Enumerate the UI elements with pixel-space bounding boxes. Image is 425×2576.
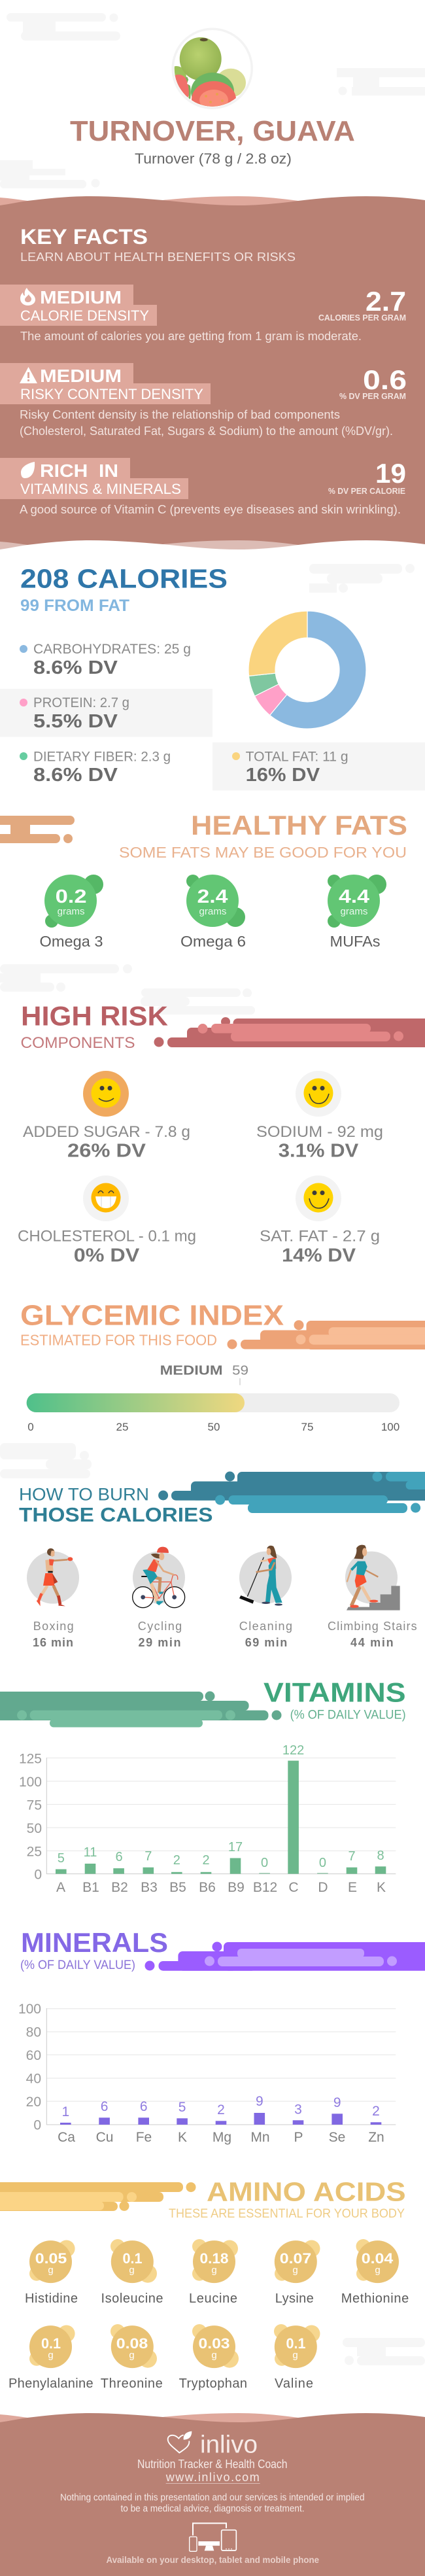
bar chart: minerals: 40: [26, 2071, 41, 2087]
fact: calorie density: [0, 285, 406, 343]
heading: AMINO ACIDS: [207, 2177, 406, 2207]
website: www.inlivo.com: [165, 2471, 260, 2484]
fat: omega 3: Omega 3: [39, 933, 103, 950]
bar chart: minerals: Cu: [96, 2130, 113, 2145]
decorative bars: [154, 1017, 425, 1047]
decorative bars: [0, 816, 75, 843]
fat: omega 3: [39, 875, 103, 950]
bar chart: minerals: 60: [26, 2048, 41, 2063]
value: 2.7: [366, 286, 406, 317]
amino: threonine: g: [129, 2350, 135, 2361]
icon: warning: [20, 367, 37, 383]
panel: high risk: [18, 1001, 425, 1266]
bar chart: vitamins: 2: [202, 1853, 210, 1868]
activity: boxing: [27, 1548, 79, 1649]
decorative bars: [145, 1941, 425, 1971]
rating: MEDIUM: [40, 287, 122, 307]
food photo: guava: [171, 27, 253, 109]
bar chart: minerals: Mg: [212, 2130, 231, 2145]
component: added sugar: 26% DV: [67, 1141, 146, 1162]
fat: MUFAs: 4.4: [339, 886, 369, 907]
fat: omega 6: grams: [199, 906, 226, 917]
activity: cycling: Cycling: [138, 1620, 182, 1633]
component: sodium: SODIUM - 92 mg: [256, 1123, 383, 1141]
nutrient: total fat: [212, 742, 425, 790]
component: added sugar: [23, 1071, 190, 1162]
icon: boxer: [27, 1548, 79, 1606]
panel: minerals: [18, 1927, 425, 2145]
title: TURNOVER, GUAVA: [70, 115, 355, 147]
disclaimer: [60, 2493, 365, 2515]
bar chart: minerals: Zn: [368, 2130, 384, 2145]
bar chart: minerals: Mn: [250, 2130, 270, 2145]
label: RISKY CONTENT DENSITY: [20, 386, 203, 402]
nutrient: carbohydrates: [20, 642, 191, 678]
amino: lysine: g: [292, 2265, 298, 2276]
nutrient: carbohydrates: 8.6% DV: [33, 657, 118, 678]
fat: omega 6: Omega 6: [180, 933, 246, 950]
bar chart: minerals: 5: [178, 2100, 186, 2115]
amino: leucine: Leucine: [189, 2291, 237, 2306]
bar chart: vitamins: 6: [115, 1850, 123, 1864]
nutrient: carbohydrates: CARBOHYDRATES: 25 g: [33, 642, 191, 657]
bar chart: vitamins: 7: [144, 1849, 152, 1864]
panel: healthy fats: [0, 810, 407, 950]
gauge scale: 100: [381, 1421, 400, 1433]
unit: % DV PER CALORIE: [328, 486, 405, 496]
icon: devices: [190, 2523, 236, 2551]
icon: person sweeping: [239, 1546, 292, 1606]
bar chart: vitamins: [19, 1743, 396, 1895]
bar chart: minerals: 6: [140, 2099, 148, 2114]
value: 0.6: [363, 364, 407, 395]
bar chart: minerals: 9: [256, 2094, 264, 2109]
bar chart: vitamins: 122: [282, 1743, 304, 1758]
activity: climbing stairs: [328, 1545, 417, 1649]
bar chart: vitamins: B2: [111, 1880, 128, 1895]
bar chart: minerals: 0: [33, 2118, 41, 2132]
description: [20, 408, 393, 438]
donut chart: [248, 611, 366, 729]
component: saturated fat: SAT. FAT - 2.7 g: [260, 1228, 380, 1245]
heading: HEALTHY FATS: [191, 810, 407, 841]
rating: MEDIUM: [160, 1363, 223, 1378]
bar chart: vitamins: E: [348, 1880, 357, 1895]
activity: cleaning: 69 min: [245, 1636, 287, 1649]
amino: histidine: 0.05: [35, 2250, 67, 2267]
gauge scale: 25: [116, 1421, 128, 1433]
fact: risky content density: [0, 363, 407, 438]
fat: omega 6: [180, 875, 246, 950]
label: CALORIE DENSITY: [20, 307, 149, 324]
component: cholesterol: 0% DV: [74, 1245, 140, 1266]
amino: threonine: 0.08: [116, 2335, 148, 2352]
subheading: SOME FATS MAY BE GOOD FOR YOU: [119, 844, 407, 861]
wave background: [0, 2413, 425, 2576]
bar chart: vitamins: D: [318, 1880, 328, 1895]
value: 19: [375, 458, 406, 489]
bar chart: vitamins: 8: [377, 1849, 384, 1863]
activity: boxing: Boxing: [33, 1620, 74, 1633]
amino: methionine: Methionine: [341, 2291, 409, 2306]
bar chart: vitamins: B9: [228, 1880, 245, 1895]
amino: tryptophan: [179, 2324, 247, 2391]
logo wordmark: inlivo: [200, 2431, 258, 2459]
amino: valine: [274, 2324, 320, 2391]
icon: person on stairs: [345, 1545, 400, 1610]
disclaimer: to be a medical advice, diagnosis or treatment.: [120, 2504, 305, 2515]
amino: phenylalanine: 0.1: [41, 2335, 61, 2352]
value: 59: [232, 1363, 248, 1378]
bar chart: vitamins: K: [377, 1880, 386, 1895]
gauge scale: 50: [208, 1421, 220, 1433]
panel: footer: [0, 2413, 425, 2576]
gauge scale: 75: [301, 1421, 313, 1433]
panel: vitamins: [0, 1677, 406, 1895]
activity: boxing: 16 min: [33, 1636, 73, 1649]
nutrient: dietary fiber: [20, 749, 171, 786]
activity: climbing stairs: 44 min: [350, 1636, 394, 1649]
amino: threonine: [101, 2324, 163, 2391]
bar chart: minerals: Fe: [136, 2130, 152, 2145]
bar chart: vitamins: 17: [228, 1840, 243, 1854]
bar chart: vitamins: B6: [199, 1880, 216, 1895]
heading: VITAMINS: [264, 1677, 406, 1708]
nutrient: total fat: 16% DV: [246, 765, 320, 786]
bar chart: vitamins: C: [288, 1880, 299, 1895]
bar chart: minerals: [18, 2002, 396, 2145]
nutrient: dietary fiber: 8.6% DV: [33, 765, 118, 786]
heading: HIGH RISK: [21, 1001, 168, 1031]
heading: MINERALS: [21, 1927, 168, 1958]
bar chart: minerals: 2: [372, 2104, 380, 2119]
fat: omega 3: 0.2: [56, 886, 87, 907]
bar chart: vitamins: 125: [19, 1751, 42, 1766]
panel: amino acids: [0, 2177, 409, 2391]
icon: cyclist: [133, 1547, 185, 1608]
amino: valine: 0.1: [286, 2335, 306, 2352]
label: VITAMINS & MINERALS: [20, 481, 181, 497]
subheading: COMPONENTS: [21, 1034, 135, 1052]
description: Risky Content density is the relationship of bad components: [20, 408, 340, 421]
component: added sugar: ADDED SUGAR - 7.8 g: [23, 1123, 190, 1141]
nutrient: protein: PROTEIN: 2.7 g: [33, 695, 129, 710]
rating: RICH IN: [40, 461, 118, 481]
amino: histidine: g: [48, 2265, 54, 2276]
panel: glycemic index: [20, 1300, 425, 1433]
activity: climbing stairs: Climbing Stairs: [328, 1620, 417, 1633]
amino: threonine: Threonine: [101, 2376, 163, 2391]
logo icon: [168, 2431, 192, 2453]
bar chart: minerals: P: [294, 2130, 303, 2145]
component: saturated fat: 14% DV: [282, 1245, 356, 1266]
wave top: [0, 196, 425, 553]
panel: key facts: [0, 196, 425, 560]
component: sodium: [256, 1071, 383, 1162]
bar chart: vitamins: B1: [82, 1880, 99, 1895]
amino: lysine: [275, 2240, 320, 2306]
amino: phenylalanine: Phenylalanine: [8, 2376, 94, 2391]
subheading: LEARN ABOUT HEALTH BENEFITS OR RISKS: [20, 251, 296, 264]
fat: MUFAs: MUFAs: [330, 933, 381, 950]
bar chart: vitamins: 2: [173, 1853, 180, 1868]
fat: omega 3: grams: [58, 906, 85, 917]
icon: flame: [20, 288, 35, 305]
heading line 2: THOSE CALORIES: [19, 1503, 213, 1526]
heading: KEY FACTS: [20, 225, 148, 249]
nutrient: dietary fiber: DIETARY FIBER: 2.3 g: [33, 749, 171, 764]
amino: phenylalanine: g: [48, 2350, 54, 2361]
bar chart: minerals: 9: [333, 2095, 341, 2110]
amino: lysine: 0.07: [280, 2250, 311, 2267]
bar chart: vitamins: 25: [27, 1844, 42, 1859]
amino: histidine: [25, 2240, 78, 2306]
amino: valine: Valine: [275, 2376, 313, 2391]
fat: omega 6: 2.4: [197, 886, 228, 907]
amino: leucine: g: [211, 2265, 217, 2276]
amino: tryptophan: g: [211, 2350, 217, 2361]
amino: isoleucine: 0.1: [123, 2250, 143, 2267]
heading: 208 CALORIES: [20, 564, 228, 594]
activity: cleaning: Cleaning: [239, 1620, 292, 1633]
description: (Cholesterol, Saturated Fat, Sugars & Sodium) to the amount (%DV/gr).: [20, 425, 393, 438]
tagline: Nutrition Tracker & Health Coach: [137, 2458, 288, 2471]
fact: vitamins and minerals: [0, 458, 406, 516]
bar chart: minerals: 2: [217, 2102, 225, 2117]
bar chart: vitamins: 11: [84, 1845, 97, 1860]
bar chart: minerals: 3: [294, 2102, 302, 2117]
description: A good source of Vitamin C (prevents eye diseases and skin wrinkling).: [20, 503, 401, 516]
fat: MUFAs: grams: [340, 906, 367, 917]
bar chart: minerals: Se: [329, 2130, 345, 2145]
heading line 1: HOW TO BURN: [19, 1485, 149, 1505]
unit: % DV PER GRAM: [339, 391, 406, 401]
bar chart: vitamins: B5: [169, 1880, 186, 1895]
decorative bars: [0, 1692, 281, 1727]
bar chart: vitamins: 50: [27, 1821, 42, 1836]
activity: cycling: 29 min: [139, 1636, 180, 1649]
gauge: [27, 1378, 400, 1412]
component: saturated fat: [260, 1175, 380, 1266]
amino: tryptophan: Tryptophan: [179, 2376, 247, 2391]
amino: methionine: [341, 2239, 409, 2306]
bar chart: minerals: 6: [101, 2099, 108, 2114]
component: cholesterol: CHOLESTEROL - 0.1 mg: [18, 1228, 196, 1245]
bar chart: minerals: 1: [61, 2104, 69, 2119]
bar chart: vitamins: 75: [27, 1798, 42, 1813]
component: sodium: 3.1% DV: [279, 1141, 359, 1162]
bar chart: vitamins: 0: [319, 1856, 326, 1870]
amino: isoleucine: g: [129, 2265, 135, 2276]
nutrient: protein: [0, 689, 212, 737]
bar chart: vitamins: B12: [253, 1880, 277, 1895]
subheading: (% OF DAILY VALUE): [290, 1709, 406, 1722]
decorative bars: [228, 1320, 425, 1349]
subheading: ESTIMATED FOR THIS FOOD: [20, 1332, 217, 1349]
subheading: (% OF DAILY VALUE): [20, 1958, 135, 1972]
availability note: Available on your desktop, tablet and mobile phone: [106, 2554, 319, 2565]
unit: CALORIES PER GRAM: [318, 313, 406, 322]
bar chart: vitamins: 0: [34, 1868, 42, 1883]
bar chart: minerals: 20: [26, 2095, 41, 2110]
nutrient: protein: 5.5% DV: [33, 711, 118, 732]
bar chart: minerals: 80: [26, 2025, 41, 2040]
serving size: Turnover (78 g / 2.8 oz): [135, 150, 292, 167]
amino: histidine: Histidine: [25, 2291, 78, 2306]
activity: cycling: [133, 1547, 185, 1649]
amino: methionine: 0.04: [362, 2250, 394, 2267]
bar chart: minerals: K: [178, 2130, 187, 2145]
panel: header: [70, 29, 355, 167]
panel: calories: [0, 564, 425, 790]
bar chart: vitamins: 100: [19, 1775, 42, 1790]
bar chart: vitamins: 7: [348, 1849, 356, 1864]
fat: MUFAs: [328, 875, 386, 950]
subheading: THESE ARE ESSENTIAL FOR YOUR BODY: [169, 2206, 405, 2221]
decorative bars: [0, 2182, 196, 2211]
bar chart: vitamins: 5: [58, 1851, 65, 1866]
component: cholesterol: [18, 1175, 196, 1266]
bar chart: vitamins: 0: [261, 1856, 268, 1870]
wave bottom: [0, 540, 425, 560]
icon: leaf: [21, 462, 35, 478]
amino: leucine: [189, 2239, 238, 2306]
amino: valine: g: [292, 2350, 298, 2361]
heading: GLYCEMIC INDEX: [20, 1300, 284, 1332]
rating: MEDIUM: [40, 366, 122, 386]
nutrient: total fat: TOTAL FAT: 11 g: [246, 749, 348, 764]
amino: leucine: 0.18: [200, 2250, 229, 2267]
decorative bars: [158, 1472, 425, 1513]
gauge scale: [27, 1421, 400, 1433]
bar chart: vitamins: A: [56, 1880, 65, 1895]
amino: phenylalanine: [8, 2325, 94, 2391]
panel: burn calories: [19, 1472, 425, 1649]
disclaimer: Nothing contained in this presentation and our services is intended or implied: [60, 2493, 365, 2503]
amino: tryptophan: 0.03: [199, 2335, 230, 2352]
subheading: 99 FROM FAT: [20, 597, 129, 615]
activity: cleaning: [239, 1546, 292, 1649]
description: The amount of calories you are getting from 1 gram is moderate.: [20, 330, 362, 343]
amino: isoleucine: Isoleucine: [101, 2291, 163, 2306]
bar chart: vitamins: B3: [141, 1880, 158, 1895]
amino: lysine: Lysine: [275, 2291, 314, 2306]
bar chart: minerals: 100: [18, 2002, 41, 2017]
amino: methionine: g: [375, 2265, 381, 2276]
bar chart: minerals: Ca: [58, 2130, 75, 2145]
gauge scale: 0: [27, 1421, 34, 1433]
amino: isoleucine: [101, 2239, 163, 2306]
